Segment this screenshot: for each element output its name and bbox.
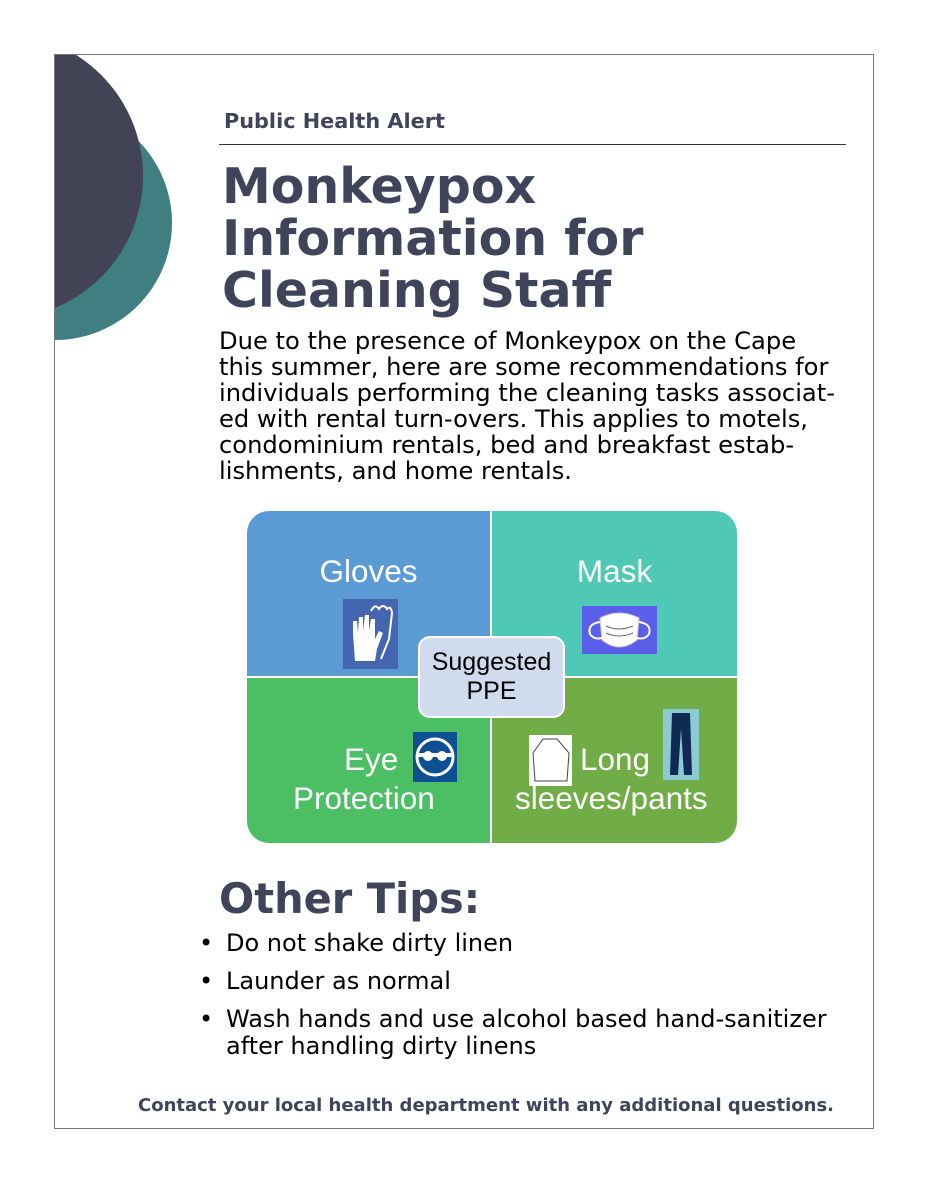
icon: shirt [529,735,572,786]
tips list: • [199,1005,213,1033]
intro text: condominium rentals, bed and breakfast estab- [219,431,794,459]
panel: long sleeves/pants: Long [580,741,650,777]
title [222,158,644,319]
icon: goggles [413,732,457,782]
decorative circles [55,55,172,340]
title: Monkeypox [222,158,536,215]
panel: mask [492,511,737,676]
panel: eye protection [247,678,490,843]
PPE grid [247,511,737,843]
panel: long sleeves/pants [492,678,737,843]
intro text [219,327,835,485]
tips list: • [199,929,213,957]
icon: pants [663,709,699,780]
intro text: Due to the presence of Monkeypox on the Cape [219,327,796,355]
title: Information for [222,210,643,267]
icon: gloves [343,599,398,669]
tips list: Wash hands and use alcohol based hand-sanitizer [226,1005,827,1033]
header label: Public Health Alert [224,109,445,133]
tips list: after handling dirty linens [226,1032,536,1060]
tips list: • [199,967,213,995]
intro text: individuals performing the cleaning tasks associat- [219,379,835,407]
center label: suggested PPE: Suggested [432,648,551,676]
tips list: Do not shake dirty linen [226,929,513,957]
intro text: ed with rental turn-overs. This applies to motels, [219,405,808,433]
panel: eye protection: Eye [344,741,398,777]
panel: long sleeves/pants: sleeves/pants [515,780,708,816]
icon: mask [582,606,657,654]
tips list [199,929,827,1060]
other tips heading: Other Tips: [219,874,480,923]
center label: suggested PPE: PPE [466,677,517,705]
center label: suggested PPE [418,636,565,718]
page frame [54,54,874,1129]
title: Cleaning Staff [222,262,611,319]
tips list: Launder as normal [226,967,451,995]
panel: mask: Mask [577,553,652,589]
panel: gloves [247,511,490,676]
panel: eye protection: Protection [293,780,435,816]
intro text: lishments, and home rentals. [219,457,572,485]
panel: gloves: Gloves [319,553,418,589]
footer: Contact your local health department with any additional questions. [138,1095,834,1116]
intro text: this summer, here are some recommendations for [219,353,828,381]
